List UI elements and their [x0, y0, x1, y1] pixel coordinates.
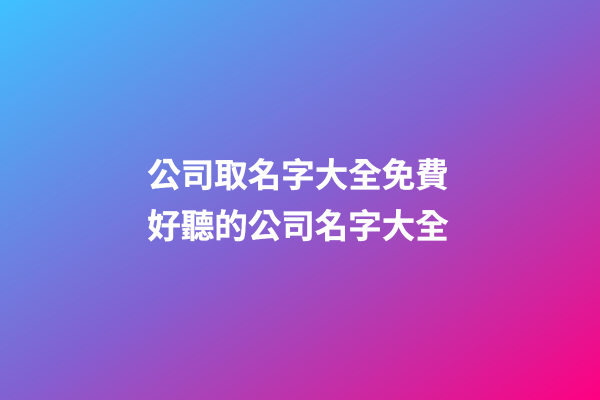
title: 公司取名字大全免費 — [147, 158, 449, 195]
title: 好聽的公司名字大全 — [147, 209, 449, 246]
title — [147, 158, 449, 246]
